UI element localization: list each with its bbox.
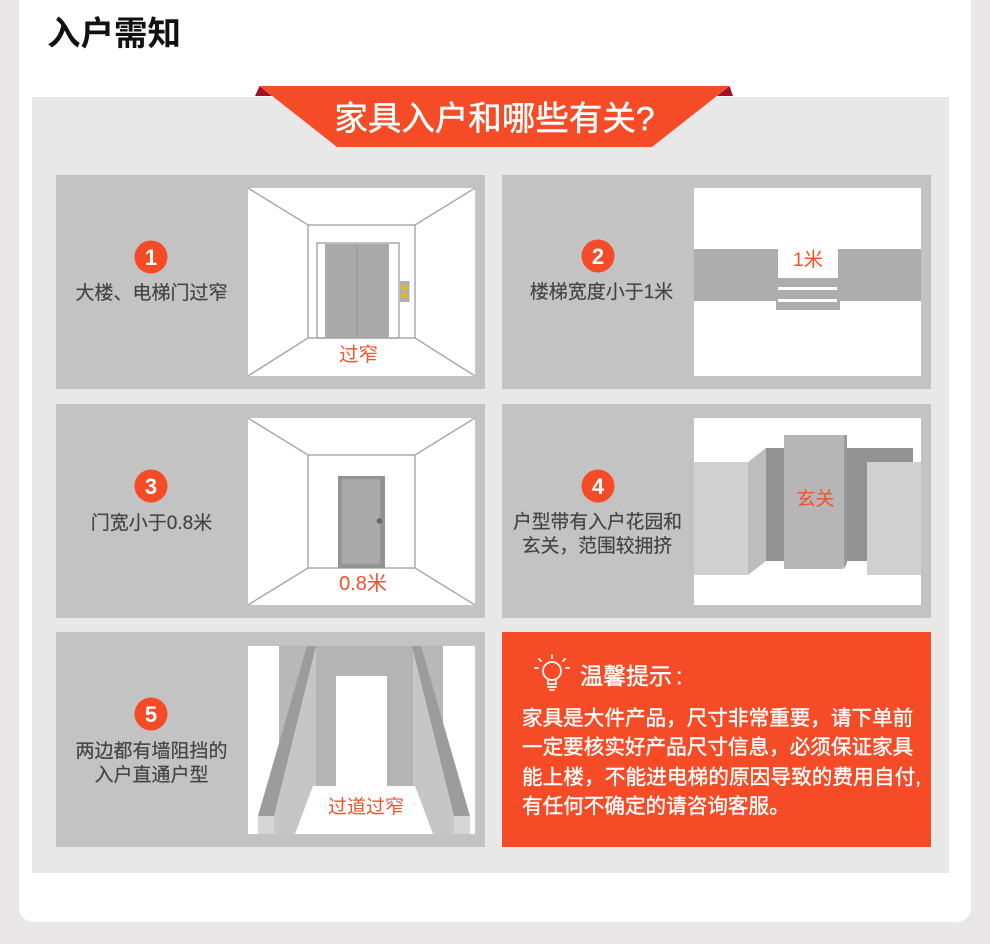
illustration: corridor xyxy=(248,646,475,834)
caption 4: 户型带有入户花园和 xyxy=(513,511,682,532)
panel 1: elevator door too narrow xyxy=(56,175,485,389)
panel 4: garden and foyer layout xyxy=(502,404,931,618)
label: too narrow: 过窄 xyxy=(339,344,378,366)
tips body: 一定要核实好产品尺寸信息，必须保证家具 xyxy=(522,736,913,759)
label: 1 metre: 1米 xyxy=(793,249,823,271)
panel 5: walls on both sides xyxy=(56,632,485,847)
badge 5 xyxy=(134,698,168,730)
caption 4 xyxy=(513,511,682,556)
badge 1: 1 xyxy=(145,245,157,270)
tips heading: 温馨提示: xyxy=(580,663,682,689)
label: 0.8 metre: 0.8米 xyxy=(339,572,387,595)
icon: light bulb xyxy=(535,655,569,690)
badge 4: 4 xyxy=(592,474,605,499)
panel: warm tips xyxy=(502,632,931,847)
illustration: stairs xyxy=(694,188,921,376)
banner: furniture entry question xyxy=(255,86,733,147)
label: corridor too narrow: 过道过窄 xyxy=(328,796,404,818)
panel 3: door narrower than 0.8m xyxy=(56,404,485,618)
badge 3: 3 xyxy=(145,474,157,499)
tips body xyxy=(522,707,921,818)
badge 4 xyxy=(582,470,614,502)
illustration: door xyxy=(248,418,475,605)
caption 2: 楼梯宽度小于1米 xyxy=(530,281,673,303)
gray content panel xyxy=(32,97,949,873)
caption 5: 入户直通户型 xyxy=(94,764,209,786)
panel 2: stairs narrower than 1m xyxy=(502,175,931,389)
badge 3 xyxy=(134,470,168,502)
caption 5 xyxy=(75,740,228,786)
caption 4: 玄关，范围较拥挤 xyxy=(522,535,672,556)
badge 5: 5 xyxy=(145,702,157,727)
banner: furniture entry question: 家具入户和哪些有关? xyxy=(334,101,655,138)
badge 2 xyxy=(582,240,614,272)
caption 3: 门宽小于0.8米 xyxy=(91,512,212,534)
label: foyer: 玄关 xyxy=(796,488,835,510)
badge 1 xyxy=(134,240,168,274)
caption 5: 两边都有墙阻挡的 xyxy=(75,740,228,762)
title: 入户需知 xyxy=(47,16,181,53)
illustration: foyer xyxy=(694,418,921,605)
tips body: 家具是大件产品，尺寸非常重要，请下单前 xyxy=(522,707,913,730)
caption 1: 大楼、电梯门过窄 xyxy=(75,282,228,304)
illustration: elevator xyxy=(248,188,475,376)
tips body: 能上楼，不能进电梯的原因导致的费用自付, xyxy=(522,766,921,789)
tips body: 有任何不确定的请咨询客服。 xyxy=(522,795,790,818)
badge 2: 2 xyxy=(592,244,604,269)
